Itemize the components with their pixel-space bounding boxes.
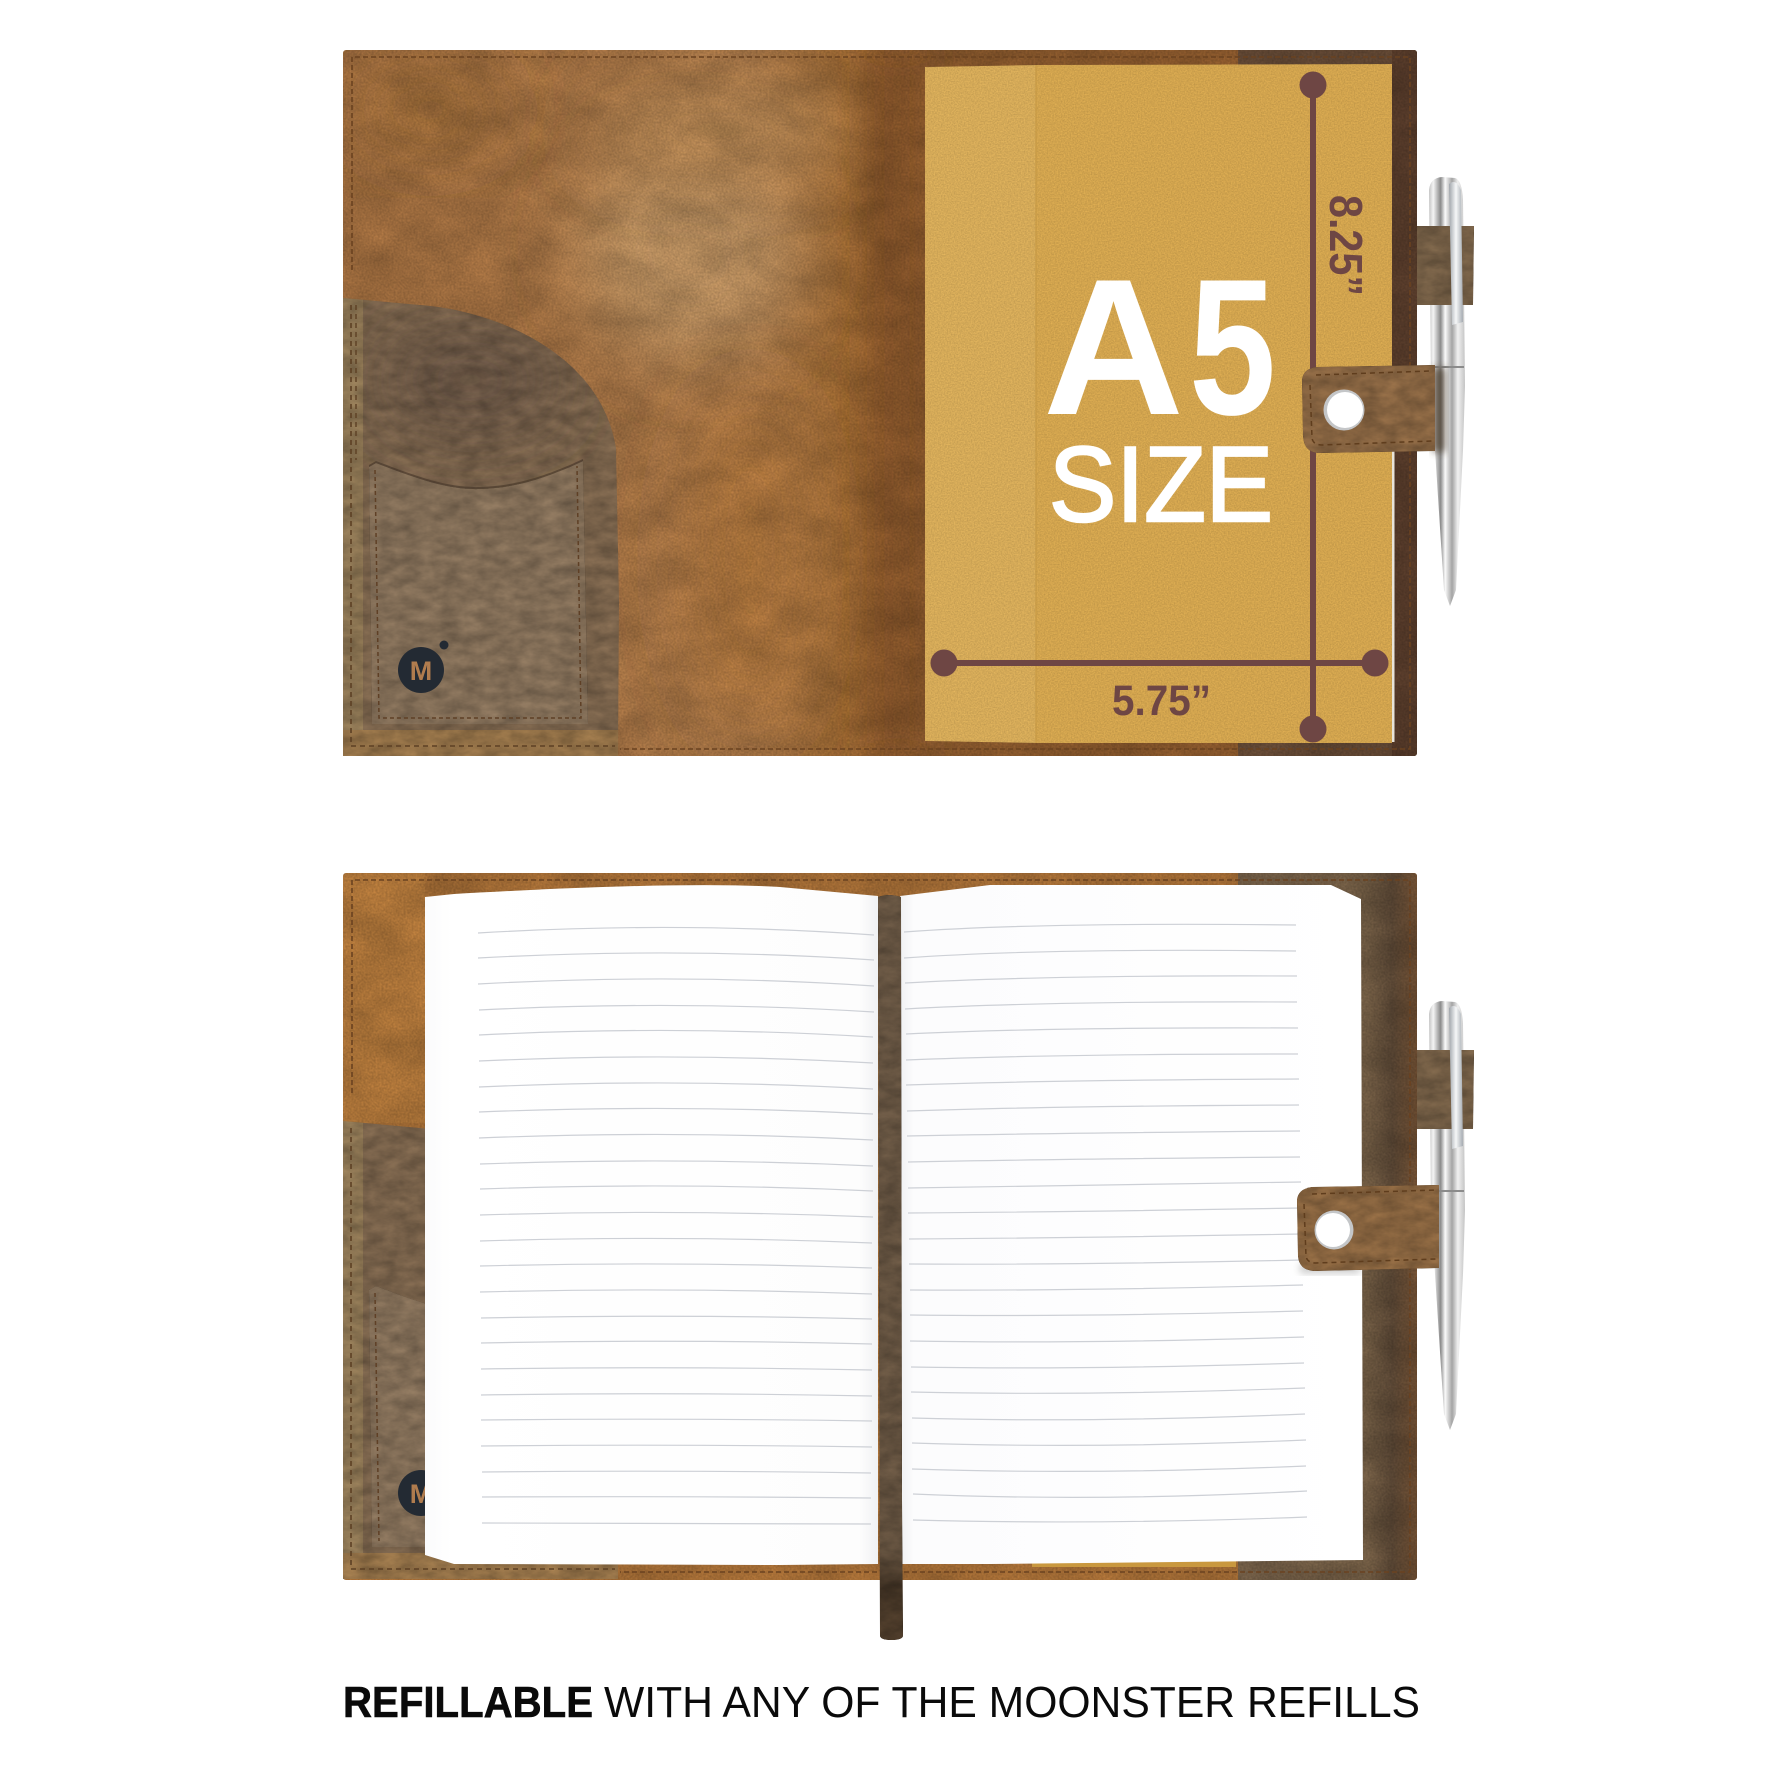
ruled lines: left page bbox=[478, 927, 874, 1524]
snap tab shadow bbox=[1300, 1264, 1360, 1273]
label: width 5.75 inches: 5.75” bbox=[1112, 677, 1211, 725]
leather pocket bbox=[343, 1121, 623, 1579]
pen clip bbox=[1449, 1006, 1463, 1149]
heading: A5: 5 bbox=[1189, 239, 1276, 456]
panel: open journal cover with kraft notebook insert bbox=[343, 50, 1474, 756]
card slot bbox=[369, 1286, 480, 1547]
heading: A5 bbox=[1043, 239, 1276, 456]
caption: rest of the sentence: WITH ANY OF THE MOONSTER REFILLS bbox=[604, 1679, 1420, 1727]
pen loop bbox=[1417, 1050, 1474, 1129]
snap tab shadow bbox=[1433, 368, 1445, 452]
label: height 8.25 inches: 8.25” bbox=[1320, 195, 1372, 296]
leather pocket bbox=[343, 298, 623, 756]
ribbon bookmark bbox=[878, 895, 903, 1640]
icon: embossed brand logo bbox=[398, 1470, 444, 1516]
snap closure tab bbox=[1302, 365, 1435, 453]
pen clip bbox=[1449, 182, 1463, 325]
vertical dimension line bbox=[1300, 72, 1326, 742]
leather cover interior bbox=[343, 873, 1417, 1580]
snap closure tab bbox=[1297, 1185, 1439, 1271]
right page bbox=[900, 885, 1363, 1564]
icon: embossed brand logo: M bbox=[410, 656, 432, 686]
cover stitching bbox=[352, 880, 1410, 1572]
dark cover edge behind notebook bbox=[1238, 50, 1417, 756]
caption bbox=[343, 1679, 1420, 1727]
caption: bold lead word: REFILLABLE bbox=[343, 1679, 593, 1727]
icon: embossed brand logo: M bbox=[410, 1479, 432, 1509]
card slot bbox=[369, 459, 588, 724]
cover stitching bbox=[352, 57, 1410, 749]
kraft cover peeking below pages bbox=[1032, 1556, 1236, 1567]
ruled lines: right page bbox=[904, 924, 1307, 1522]
pen bbox=[1429, 1001, 1465, 1430]
left page bbox=[425, 885, 878, 1565]
heading: SIZE: SIZE bbox=[1049, 424, 1273, 544]
horizontal dimension line bbox=[930, 650, 1388, 676]
panel: open journal cover with lined refill notebook bbox=[343, 873, 1474, 1640]
leather cover interior bbox=[343, 50, 1417, 756]
pen bbox=[1429, 177, 1465, 606]
heading: A5: A bbox=[1043, 239, 1184, 456]
kraft notebook bbox=[925, 64, 1394, 743]
dark cover edge bbox=[1238, 873, 1417, 1580]
icon: embossed brand logo bbox=[398, 640, 448, 693]
pen loop bbox=[1417, 226, 1474, 305]
